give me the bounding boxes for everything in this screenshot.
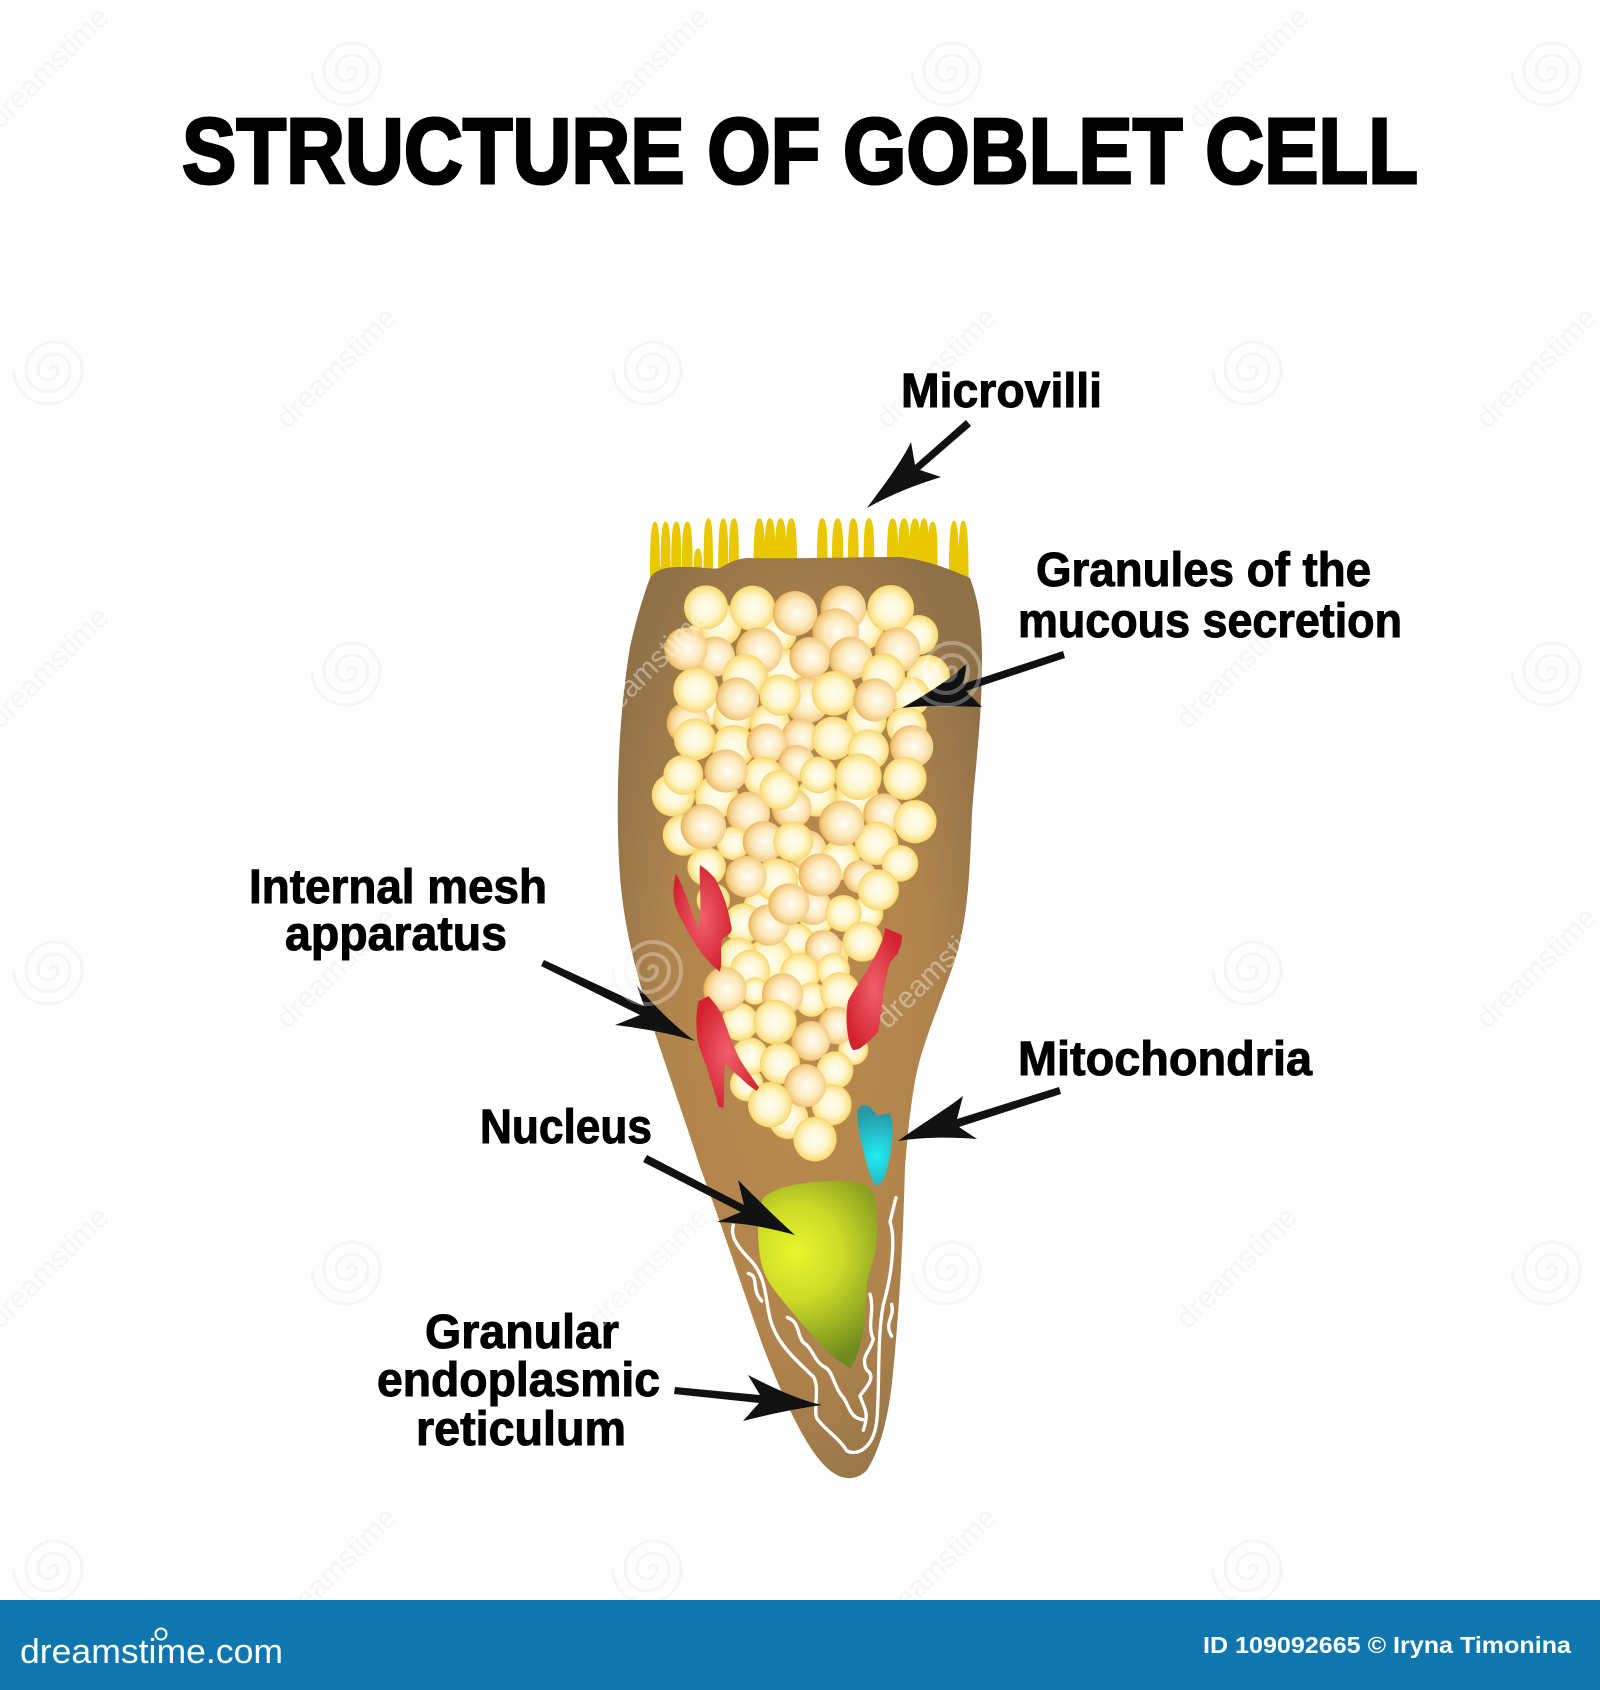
arrow: Microvilli	[867, 420, 971, 508]
cell body	[618, 557, 982, 1478]
label: Granular endoplasmic reticulum: endoplasmic	[377, 1354, 660, 1407]
arrow: Mitochondria	[898, 1087, 1061, 1141]
footer credit: ID 109092665 © Iryna Timonina	[1203, 1632, 1571, 1658]
arrow: Granular endoplasmic reticulum	[674, 1375, 822, 1421]
goblet cell diagram	[618, 518, 982, 1478]
text: dreamstime	[270, 1501, 404, 1635]
text: dreamstime	[1170, 1201, 1304, 1335]
arrow: Internal mesh apparatus	[541, 960, 695, 1041]
internal mesh apparatus	[673, 865, 902, 1108]
text: dreamstime	[582, 1201, 716, 1335]
text: dreamstime	[870, 301, 1004, 435]
label: Granules of the mucous secretion	[1018, 544, 1402, 648]
label: Nucleus: Nucleus	[480, 1101, 652, 1154]
footer logo: dreamstime.com	[20, 1633, 283, 1671]
text: dreamstime	[270, 901, 404, 1035]
arrow: Granules	[902, 651, 1065, 708]
granular endoplasmic reticulum	[732, 1198, 896, 1452]
label: Granular endoplasmic reticulum: Granular	[425, 1306, 619, 1359]
text: dreamstime	[582, 1201, 716, 1335]
microvilli	[650, 518, 969, 583]
footer bar	[0, 1600, 1600, 1690]
label: Microvilli: Microvilli	[901, 365, 1102, 418]
text: dreamstime	[1470, 901, 1600, 1035]
text: dreamstime	[582, 1, 716, 135]
text: dreamstime	[1182, 1, 1316, 135]
label: Internal mesh apparatus: Internal mesh	[249, 861, 547, 914]
text: dreamstime	[270, 301, 404, 435]
title: STRUCTURE OF GOBLET CELL	[182, 99, 1418, 203]
label: Granules of the mucous secretion: mucous secretion	[1018, 595, 1402, 648]
text: dreamstime	[1470, 301, 1600, 435]
arrow: Nucleus	[643, 1155, 795, 1235]
mitochondria	[857, 1105, 893, 1186]
label: Granular endoplasmic reticulum: reticulum	[416, 1403, 626, 1456]
text: dreamstime	[870, 1501, 1004, 1635]
label: Granules of the mucous secretion: Granules of the	[1036, 544, 1371, 597]
label: Granular endoplasmic reticulum	[377, 1306, 660, 1456]
label: Internal mesh apparatus	[249, 861, 547, 961]
text: dreamstime	[870, 901, 1004, 1035]
label: Internal mesh apparatus: apparatus	[285, 908, 507, 961]
label: Mitochondria: Mitochondria	[1018, 1033, 1312, 1086]
text: dreamstime	[1170, 601, 1304, 735]
mucous granules	[652, 585, 950, 1161]
text: dreamstime	[582, 601, 716, 735]
nucleus	[758, 1181, 877, 1368]
